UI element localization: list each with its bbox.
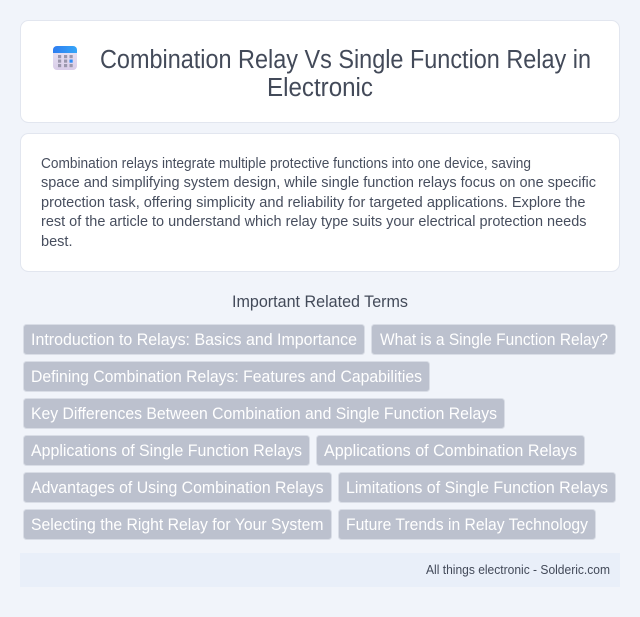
title: Electronic <box>267 74 373 102</box>
panel: intro paragraph: space and simplifying system design, while single function relays focus on one specific <box>41 174 596 191</box>
footer <box>20 553 620 587</box>
panel: title card <box>20 20 620 122</box>
tag: defining combination relays <box>24 362 430 392</box>
tag: introduction: Introduction to Relays: Basics and Importance <box>31 330 357 349</box>
tag: future trends <box>338 510 596 540</box>
tag: advantages: Advantages of Using Combination Relays <box>31 478 324 497</box>
tag: single function definition: What is a Single Function Relay? <box>380 330 608 349</box>
title: Combination Relay Vs Single Function Relay in <box>100 46 591 74</box>
tag: applications combination: Applications of Combination Relays <box>324 441 577 460</box>
panel: intro paragraph: Combination relays integrate multiple protective functions into one device, saving <box>41 155 531 172</box>
tag: applications combination <box>316 436 584 466</box>
panel: intro paragraph <box>20 134 620 272</box>
tag: key differences <box>24 398 504 428</box>
tag: future trends: Future Trends in Relay Technology <box>346 515 589 534</box>
tag: key differences: Key Differences Between Combination and Single Function Relays <box>31 404 497 423</box>
icon: calendar grid <box>53 46 77 70</box>
title <box>100 46 591 102</box>
panel: intro paragraph: rest of the article to understand which relay type suits your electrical protection needs <box>41 213 586 230</box>
tag: limitations <box>338 472 616 502</box>
tag: applications single <box>24 436 310 466</box>
tag: limitations: Limitations of Single Function Relays <box>346 478 608 497</box>
heading: important related terms: Important Related Terms <box>232 293 408 311</box>
tag: selecting <box>24 510 332 540</box>
panel: intro paragraph: best. <box>41 233 72 250</box>
panel: intro paragraph: protection task, offering simplicity and reliability for targeted applications. Explore the <box>41 194 586 211</box>
tag: applications single: Applications of Single Function Relays <box>31 441 302 460</box>
tag: advantages <box>24 472 332 502</box>
tag: introduction <box>24 324 364 354</box>
footer: All things electronic - Solderic.com <box>426 562 610 577</box>
tag: defining combination relays: Defining Combination Relays: Features and Capabilities <box>31 367 422 386</box>
tag: single function definition <box>372 324 616 354</box>
tag: selecting: Selecting the Right Relay for Your System <box>31 515 324 534</box>
tag list <box>24 324 616 540</box>
